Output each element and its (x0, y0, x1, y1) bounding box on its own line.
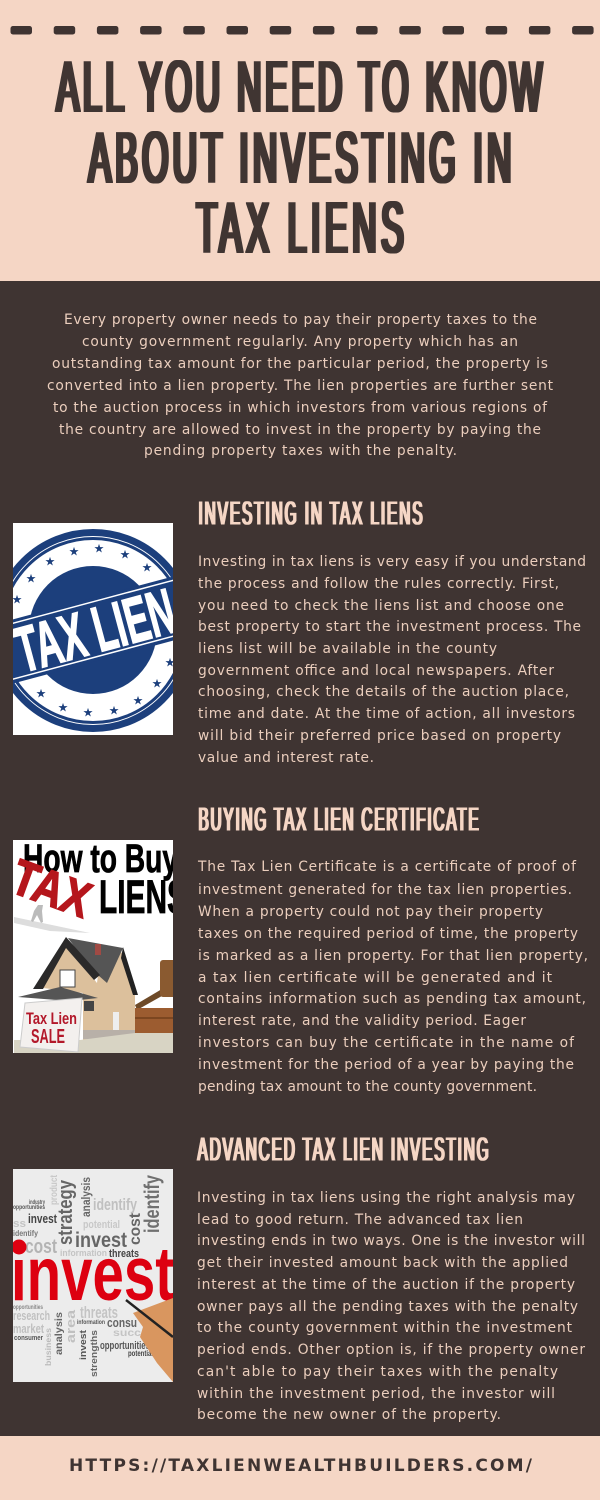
dashed rule (10, 26, 594, 34)
text block: best property to start the investment process. The (198, 619, 581, 635)
text block: to the county government within the investment (197, 1320, 573, 1336)
intro paragraph: county government regularly. Any property which has an (82, 334, 518, 350)
text block (198, 554, 586, 766)
image: invest word cloud: information (77, 1320, 105, 1326)
text block: Investing in tax liens is very easy if you understand (198, 554, 586, 570)
text block: investment generated for the tax lien properties. (198, 882, 572, 898)
image: invest word cloud: cost (127, 1212, 144, 1245)
image: invest word cloud: market (13, 1321, 44, 1336)
image: invest word cloud: cost (25, 1236, 57, 1258)
text block (197, 1190, 585, 1423)
intro paragraph: outstanding tax amount for the particular period, the property is (52, 356, 548, 372)
text block: contains information such as pending tax amount, (198, 991, 586, 1007)
text block: choosing, check the details of the auction place, (198, 684, 569, 700)
image: how to buy tax liens: TAX (4, 849, 99, 929)
image: tax lien stamp: ★ (69, 544, 79, 558)
image: invest word cloud: threats (109, 1248, 139, 1260)
intro paragraph (47, 312, 554, 459)
heading: BUYING TAX LIEN CERTIFICATE (198, 800, 479, 838)
text block: investment for the period of a year by paying the (198, 1057, 574, 1073)
image: invest word cloud: consumer (14, 1335, 43, 1342)
text block: Investing in tax liens using the right analysis may (197, 1190, 575, 1206)
image: invest word cloud: invest (75, 1229, 127, 1252)
text block: can't able to pay their taxes with the penalty (197, 1364, 558, 1380)
image: invest word cloud: research (13, 1308, 50, 1323)
image: invest word cloud (11, 1169, 174, 1382)
intro paragraph: converted into a lien property. The lien properties are further sent (47, 378, 554, 394)
image: invest word cloud: identify (93, 1195, 137, 1214)
sign: SALE (31, 1026, 65, 1048)
heading: INVESTING IN TAX LIENS (198, 494, 423, 532)
text block: time and date. At the time of action, all investors (198, 706, 575, 722)
image: invest word cloud: potential (128, 1349, 153, 1358)
footer url: HTTPS://TAXLIENWEALTHBUILDERS.COM/ (69, 1456, 533, 1476)
image: invest word cloud: ss (13, 1218, 26, 1230)
title: TAX LIENS (196, 187, 404, 268)
image: invest word cloud: area (63, 1309, 78, 1343)
image: invest word cloud: strengths (89, 1330, 99, 1377)
text block (197, 859, 588, 1095)
text block: government office and local newspapers. After (198, 663, 554, 679)
image: invest word cloud: succ (113, 1328, 142, 1339)
text block: will bid their preferred price based on property (198, 728, 561, 744)
text block: get their invested amount back with the applied (197, 1255, 568, 1271)
image: tax lien stamp: ★ (133, 694, 143, 708)
text block: investors can buy the certificate in the name of (198, 1035, 575, 1051)
title: ALL YOU NEED TO KNOW (56, 46, 542, 127)
text block: liens list will be available in the county (198, 641, 497, 657)
image: invest word cloud: opportunities (13, 1304, 43, 1311)
text block: within the investment period, the investor will (197, 1386, 555, 1402)
title: ABOUT INVESTING IN (88, 117, 511, 198)
image: invest word cloud: business (44, 1327, 53, 1366)
text block: is marked as a lien property. For that lien property, (198, 948, 588, 964)
text block: become the new owner of the property. (197, 1407, 501, 1423)
image: tax lien stamp: ★ (94, 542, 104, 556)
image: tax lien stamp (8, 523, 183, 735)
hand with pen (126, 1298, 173, 1382)
sign: Tax Lien (26, 1009, 77, 1028)
title (56, 46, 542, 268)
image: invest word cloud: opportunities (100, 1340, 150, 1352)
image: tax lien stamp: ★ (83, 706, 93, 720)
image: tax lien stamp: ★ (109, 704, 119, 718)
text block: The Tax Lien Certificate is a certificate of proof of (197, 859, 577, 875)
image: tax lien stamp: ★ (12, 592, 22, 606)
text block: lead to good return. The advanced tax lien (197, 1212, 523, 1228)
intro paragraph: to the auction process in which investors from various regions of (53, 400, 548, 416)
text block: value and interest rate. (198, 750, 374, 766)
sign (20, 998, 82, 1052)
image: tax lien stamp: ★ (45, 554, 55, 568)
text block: owner pays all the pending taxes with the penalty (197, 1299, 578, 1315)
text block: interest at the time of the auction if the property (197, 1277, 575, 1293)
text block: interest rate, and the validity period. Eager (198, 1013, 526, 1029)
header band (0, 0, 600, 281)
image: invest word cloud: industry (29, 1200, 45, 1206)
image: invest word cloud: consu (107, 1315, 137, 1330)
image: invest word cloud: threats (80, 1303, 118, 1322)
intro paragraph: the country are allowed to invest in the property by paying the (59, 422, 541, 438)
image: invest word cloud: invest (28, 1211, 58, 1226)
image: invest word cloud: identify (13, 1229, 38, 1238)
image: invest word cloud: opportunities (13, 1205, 46, 1211)
intro paragraph: Every property owner needs to pay their property taxes to the (64, 312, 537, 328)
text block: the process and follow the rules correctly. First, (198, 576, 559, 592)
image: tax lien stamp: ★ (36, 686, 46, 700)
image: invest word cloud: strategy (55, 1179, 77, 1245)
text block: When a property could not pay their property (198, 904, 543, 920)
image: invest word cloud: analysis (79, 1177, 93, 1217)
house (18, 937, 138, 1040)
text block: you need to check the liens list and choose one (198, 598, 564, 614)
image: tax lien stamp: ★ (142, 560, 152, 574)
intro paragraph: pending property taxes with the penalty. (144, 443, 457, 459)
footer band (0, 1436, 600, 1500)
image: tax lien stamp: ★ (120, 548, 130, 562)
image: how to buy tax liens (4, 837, 187, 1053)
image: invest word cloud: information (60, 1248, 107, 1258)
text block: pending tax amount to the county government. (198, 1079, 537, 1095)
text block: a tax lien certificate will be generated and it (198, 970, 553, 986)
image: invest word cloud: potential (83, 1219, 120, 1231)
image: invest word cloud: invest (78, 1330, 88, 1360)
panel: advanced tax lien investing (11, 1130, 585, 1423)
image: tax lien stamp: ★ (58, 700, 68, 714)
image: tax lien stamp: ★ (152, 676, 162, 690)
image: tax lien stamp: ★ (26, 572, 36, 586)
panel: investing in tax liens (0, 494, 586, 766)
image: tax lien stamp: ★ (165, 656, 175, 670)
text block: taxes on the required period of time, the property (198, 926, 578, 942)
text block: period ends. Other option is, if the property owner (197, 1342, 585, 1358)
panel: buying tax lien certificate (4, 800, 588, 1095)
image: invest word cloud: analysis (54, 1312, 65, 1355)
heading: ADVANCED TAX LIEN INVESTING (198, 1130, 489, 1168)
text block: investing ends in two ways. One is the investor will (197, 1233, 585, 1249)
